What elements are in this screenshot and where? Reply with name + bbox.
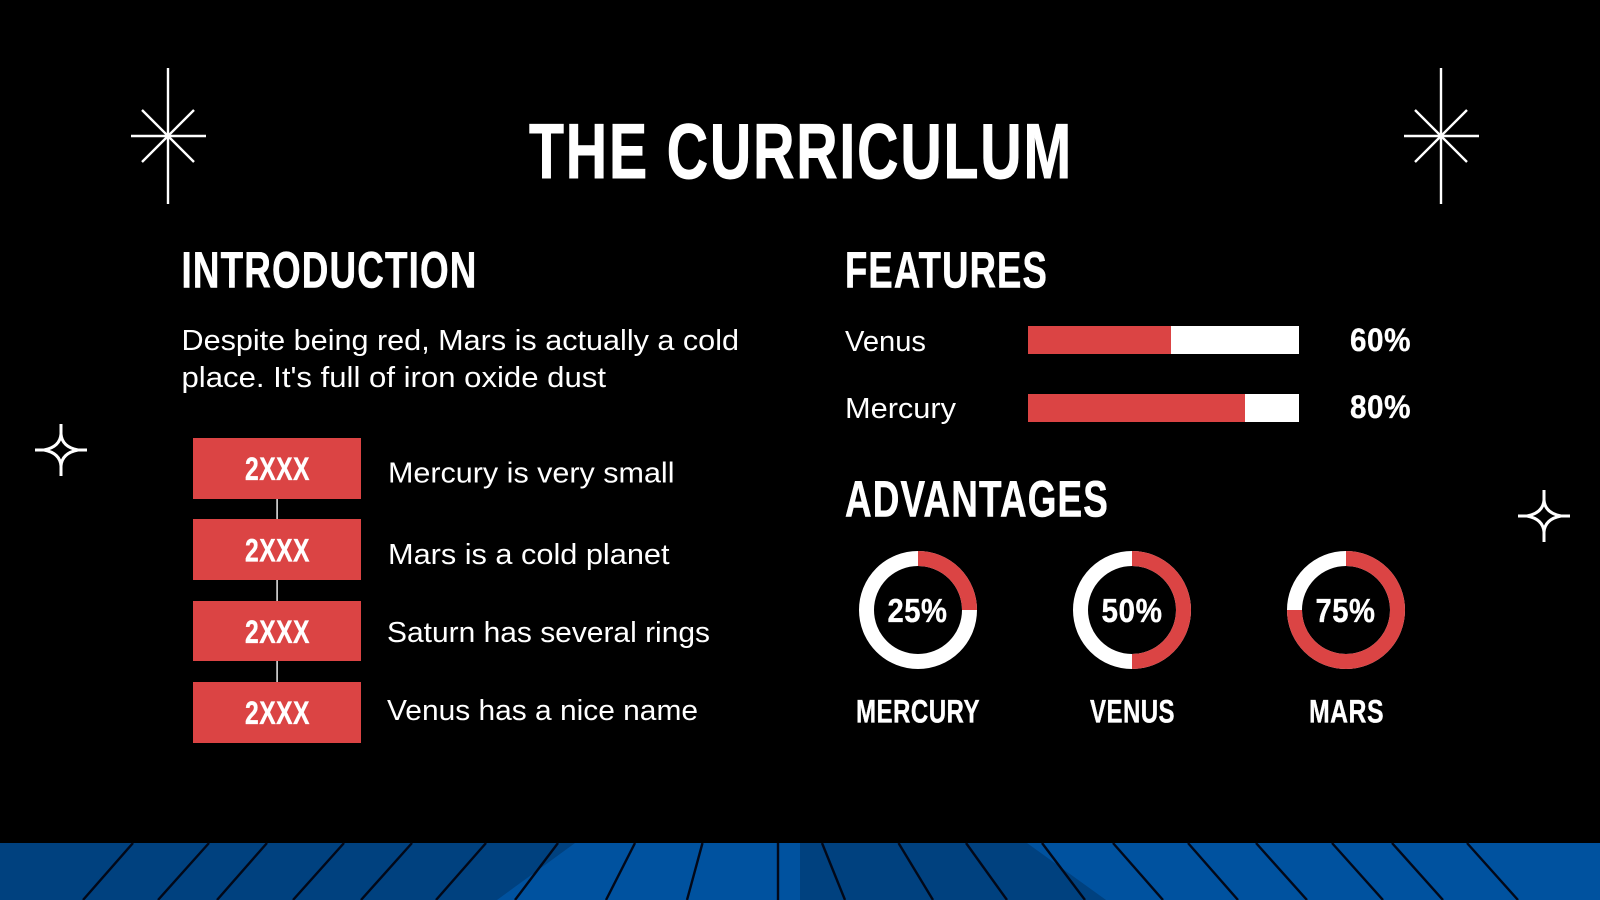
timeline item 3: Saturn has several rings (387, 617, 710, 649)
heading: advantages: ADVANTAGES (845, 470, 1109, 528)
heading: features: FEATURES (845, 242, 1048, 298)
donut: mercury 25% (856, 558, 980, 730)
bar row: mercury: Mercury (845, 393, 957, 425)
timeline item 4: Venus has a nice name (387, 695, 698, 727)
timeline item 2: 2XXX (245, 532, 310, 568)
donut: mars 75% (1294, 558, 1398, 730)
timeline item 2 (193, 519, 670, 580)
icon: small sparkle left (35, 424, 87, 476)
donut: venus 50% (1080, 558, 1184, 730)
bar row: mercury: 80% (1350, 389, 1411, 425)
bar row: venus (845, 322, 1411, 358)
icon: large asterisk star right (1404, 68, 1479, 204)
timeline item 1: 2XXX (245, 451, 310, 487)
donut: venus 50%: VENUS (1090, 694, 1175, 730)
text block: introduction body (182, 325, 739, 394)
donut: venus 50%: 50% (1102, 592, 1162, 629)
timeline item 3: 2XXX (245, 614, 310, 650)
timeline item 1: Mercury is very small (388, 458, 674, 490)
panel: advantages (845, 470, 1398, 730)
bar row: venus: 60% (1350, 322, 1411, 358)
title: THE CURRICULUM (529, 107, 1073, 195)
heading: introduction: INTRODUCTION (182, 242, 478, 298)
text block: introduction body: place. It's full of iron oxide dust (182, 362, 606, 394)
timeline item 4 (193, 682, 698, 743)
timeline item 3 (193, 601, 710, 661)
icon: large asterisk star left (131, 68, 206, 204)
panel: features (845, 242, 1411, 425)
icon: small sparkle right (1518, 490, 1570, 542)
timeline item 1 (193, 438, 674, 499)
text block: introduction body: Despite being red, Mars is actually a cold (182, 325, 739, 357)
timeline item 2: Mars is a cold planet (388, 539, 670, 571)
donut: mars 75%: 75% (1316, 592, 1376, 629)
timeline connector lines (276, 498, 278, 683)
timeline item 4: 2XXX (245, 695, 310, 731)
donut: mars 75%: MARS (1309, 694, 1384, 730)
bar row: mercury (845, 389, 1411, 425)
donut: mercury 25%: MERCURY (856, 694, 980, 730)
blue striped floor band (0, 843, 1600, 900)
bar row: venus: Venus (845, 326, 926, 358)
panel: introduction (182, 242, 739, 743)
donut: mercury 25%: 25% (888, 592, 948, 629)
